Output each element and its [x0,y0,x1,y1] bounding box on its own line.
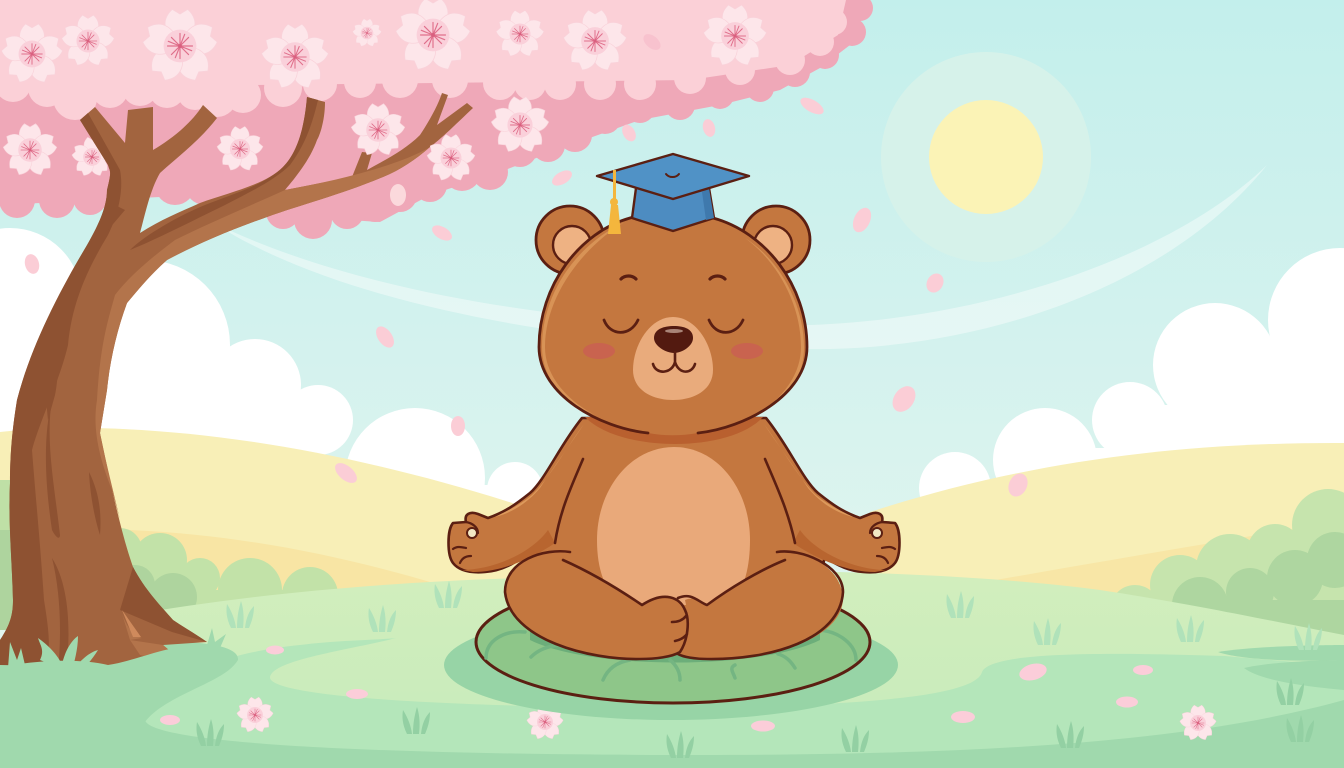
closed eyes [604,320,743,332]
graduation cap [597,154,749,234]
root highlight [120,607,190,668]
bushes left [0,480,338,630]
falling petals [23,31,1031,500]
branch shadow [130,97,318,250]
tassel [608,170,621,234]
blush [583,343,763,359]
nose [654,326,693,353]
cushion shadow [444,610,898,720]
branch highlight [95,147,430,520]
grass tufts foreground [68,678,1314,758]
grass tufts [226,581,1322,650]
clouds right [919,248,1344,524]
head [539,214,807,435]
bushes right [1110,489,1344,640]
tree trunk and branches [0,93,473,687]
meadow ground [0,571,1344,768]
left leg [505,551,688,659]
arm shading [462,530,886,572]
mouth [653,352,695,372]
wind swoosh [212,165,1267,349]
clouds left [0,228,543,548]
brows [621,276,725,279]
left arm and torso [448,418,900,620]
canopy back layer [0,0,873,239]
canopy front layer [0,0,847,120]
sun with halo [881,52,1091,262]
ground flowers [236,697,1217,742]
bark grooves [46,205,207,670]
green cushion [476,581,870,703]
mound and grass at tree base [0,628,237,768]
ground petals [160,646,1153,732]
belly [597,447,750,605]
hands [453,522,895,563]
hills [0,428,1344,640]
bark shadow [0,113,121,665]
bear [448,154,900,659]
arm lines [555,459,795,543]
leg outlines [505,551,843,659]
blossoms on canopy [0,0,768,183]
blossoms behind the tree [71,137,113,178]
ears [536,206,810,274]
muzzle [633,317,713,400]
neck shade [585,417,763,444]
right leg [678,551,843,659]
